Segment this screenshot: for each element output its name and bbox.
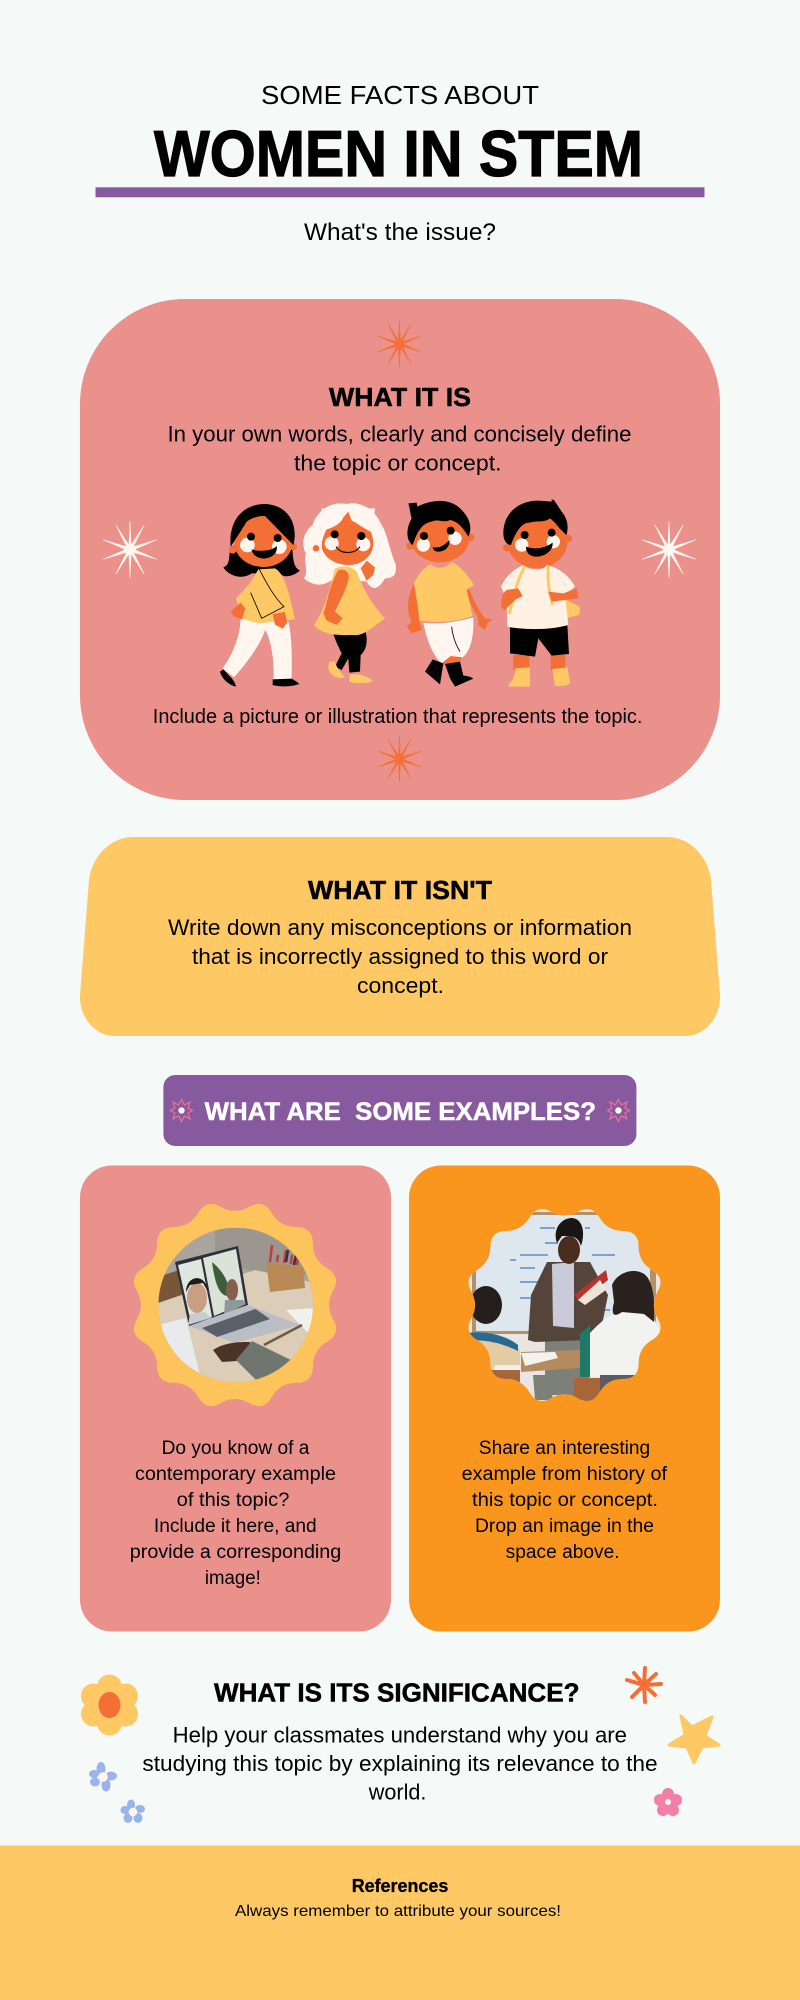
card: history example [409, 1166, 720, 1632]
card text: Include it here, and [154, 1516, 317, 1537]
card text: of this topic? [177, 1490, 289, 1511]
references heading: References [352, 1876, 448, 1896]
card text: Drop an image in the [475, 1516, 654, 1537]
heading: what it isn't: WHAT IT ISN'T [308, 875, 492, 905]
caption: include a picture: Include a picture or illustration that represents the topic. [153, 706, 642, 728]
significance text: world. [368, 1780, 426, 1805]
icon: pink star left [170, 1100, 192, 1122]
card text [462, 1438, 668, 1563]
panel: what it isn't [80, 837, 720, 1036]
panel: what it is [80, 299, 720, 800]
definition text: the topic or concept. [294, 450, 502, 476]
definition text [168, 422, 632, 476]
illustration: four children walking [220, 499, 580, 687]
icon: white burst right [642, 521, 696, 578]
photo: laptop video call [155, 1225, 317, 1385]
icon: pink flower [654, 1788, 682, 1816]
panel background [80, 299, 720, 800]
heading: what it is: WHAT IT IS [329, 382, 471, 412]
photo: teacher in classroom [468, 1209, 661, 1401]
icon: blue flower one [89, 1762, 117, 1792]
banner heading: WHAT ARE SOME EXAMPLES? [205, 1098, 596, 1126]
wavy yellow frame [134, 1204, 336, 1406]
child 3 [406, 501, 493, 687]
subtitle: What's the issue? [304, 219, 496, 246]
definition text: In your own words, clearly and concisely define [168, 422, 632, 446]
icon: white burst left [103, 521, 157, 578]
icon: orange burst top [378, 321, 421, 367]
card background [409, 1166, 720, 1632]
banner: what are some examples [163, 1075, 636, 1146]
section: what is its significance [81, 1668, 719, 1823]
child 1 [220, 504, 300, 687]
card text: provide a corresponding [130, 1542, 341, 1563]
misconceptions text: Write down any misconceptions or information [168, 915, 632, 940]
icon: pink star right [607, 1100, 629, 1122]
title: WOMEN IN STEM [154, 117, 643, 190]
card text: Do you know of a [162, 1438, 310, 1459]
misconceptions text [168, 915, 632, 998]
card background [80, 1166, 391, 1632]
footer: references [0, 1846, 800, 2000]
title underline [96, 187, 704, 197]
kicker: some facts about: SOME FACTS ABOUT [261, 80, 539, 110]
icon: orange asterisk [627, 1668, 661, 1702]
banner background [163, 1075, 636, 1146]
icon: big yellow flower [81, 1674, 138, 1736]
significance text: Help your classmates understand why you are [173, 1722, 627, 1747]
card text: space above. [506, 1542, 620, 1563]
card text: contemporary example [135, 1464, 336, 1485]
icon: yellow star [669, 1716, 719, 1763]
child 2 [303, 503, 396, 683]
significance text [142, 1722, 658, 1805]
icon: blue flower two [120, 1800, 145, 1823]
child 4 [501, 499, 580, 687]
header [96, 80, 704, 246]
misconceptions text: concept. [357, 973, 444, 998]
misconceptions text: that is incorrectly assigned to this word or [192, 944, 608, 969]
panel background [80, 837, 720, 1036]
icon: orange burst bottom [378, 736, 421, 782]
card text: Share an interesting [479, 1438, 650, 1459]
card text: example from history of [462, 1464, 668, 1485]
card text: this topic or concept. [472, 1490, 658, 1511]
card: contemporary example [80, 1166, 391, 1632]
footer background [0, 1846, 800, 2000]
card text: image! [205, 1568, 261, 1589]
references note: Always remember to attribute your sources! [235, 1903, 561, 1920]
significance text: studying this topic by explaining its relevance to the [142, 1751, 658, 1776]
card text [130, 1438, 341, 1589]
heading: what is its significance: WHAT IS ITS SIGNIFICANCE? [214, 1680, 580, 1708]
